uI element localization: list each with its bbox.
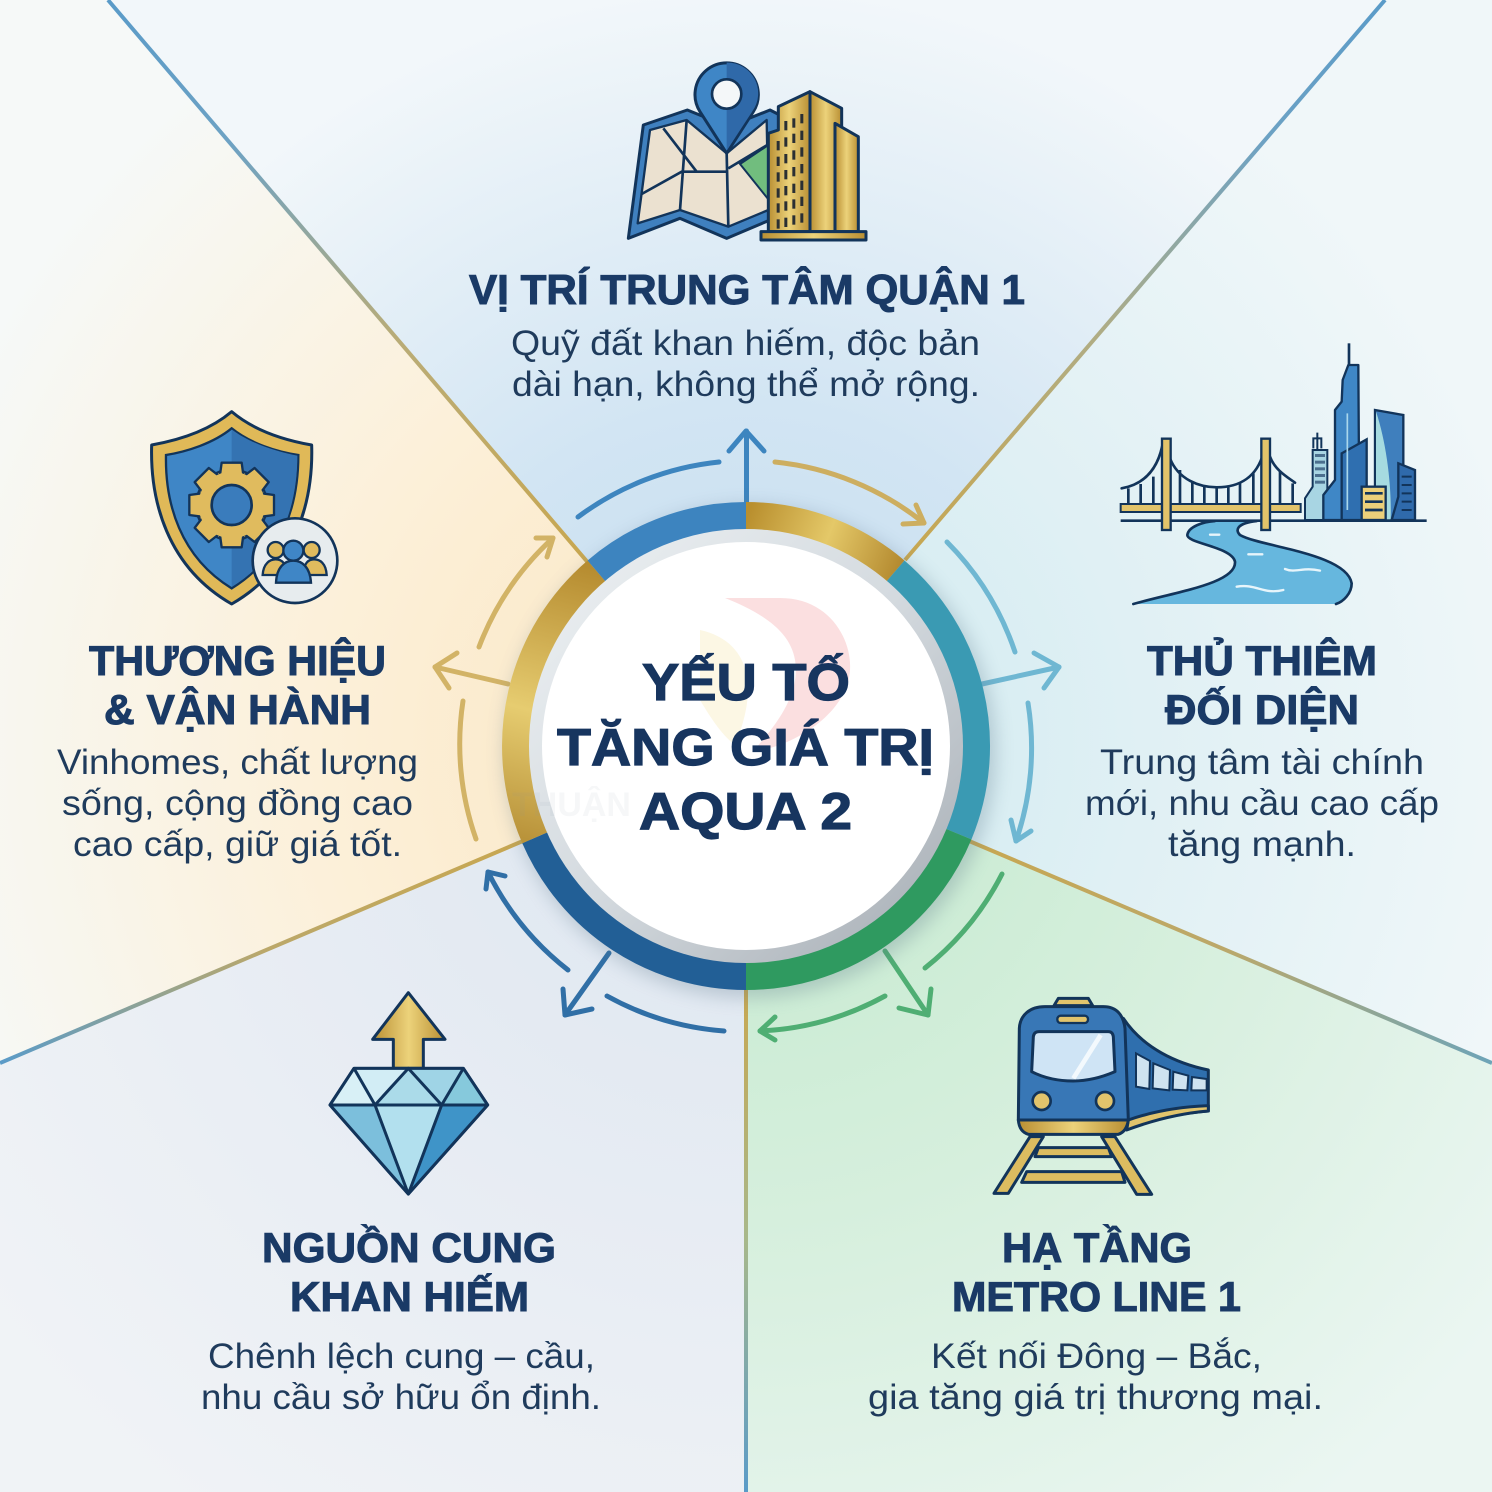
panel: Thu Thiem [1085, 343, 1439, 864]
text: brand and operation [57, 743, 418, 864]
watermark logo [512, 598, 850, 824]
icon: shield with gear and people [152, 412, 337, 604]
circular arrows around the hub [435, 431, 1059, 1040]
skyline [1305, 343, 1415, 520]
heading: metro: METRO LINE 1 [952, 1273, 1241, 1320]
text: brand and operation: cao cấp, giữ giá tốt. [73, 825, 402, 864]
hub title: AQUA 2 [639, 783, 852, 841]
hub title [557, 653, 934, 841]
gear [189, 463, 274, 547]
train side [1123, 1018, 1208, 1130]
hub white disc [542, 542, 950, 950]
heading: metro [952, 1224, 1241, 1320]
text: metro [868, 1337, 1323, 1417]
text: Thu Thiem: tăng mạnh. [1168, 825, 1356, 864]
text: metro: Kết nối Đông – Bắc, [931, 1337, 1262, 1376]
text: location: dài hạn, không thể mở rộng. [512, 365, 980, 404]
heading: location: VỊ TRÍ TRUNG TÂM QUẬN 1 [469, 265, 1025, 313]
hub title: YẾU TỐ [642, 653, 850, 712]
icon: metro train [994, 998, 1208, 1194]
diamond [330, 1068, 488, 1194]
panel: brand and operation [57, 412, 418, 864]
heading: scarce supply [262, 1223, 556, 1320]
segmented ring [521, 521, 971, 971]
central hub [504, 506, 996, 998]
green arrows [760, 874, 1002, 1040]
map [628, 110, 782, 238]
heading: Thu Thiem: THỦ THIÊM [1147, 636, 1377, 684]
icon: bridge and skyline [1121, 343, 1427, 604]
text: metro: gia tăng giá trị thương mại. [868, 1378, 1323, 1417]
text: brand and operation: Vinhomes, chất lượng [57, 743, 418, 782]
text: Thu Thiem: mới, nhu cầu cao cấp [1085, 784, 1439, 823]
gold arc arrow top right [775, 462, 924, 524]
text: Thu Thiem [1085, 743, 1439, 864]
rails [994, 1137, 1152, 1194]
text: location [511, 324, 980, 404]
panel: scarce supply [201, 993, 601, 1417]
heading: brand and operation: THƯƠNG HIỆU [89, 636, 386, 684]
text: scarce supply: nhu cầu sở hữu ổn định. [201, 1378, 601, 1417]
teal arrows [947, 542, 1059, 841]
bridge [1121, 439, 1427, 530]
pin [695, 63, 758, 153]
blue arc and up arrow [578, 431, 764, 517]
text: scarce supply [201, 1337, 601, 1417]
shield [152, 412, 312, 604]
watermark logo: THUẬN [512, 786, 631, 824]
heading: Thu Thiem: ĐỐI DIỆN [1165, 685, 1359, 733]
people badge [253, 518, 337, 603]
heading: scarce supply: NGUỒN CUNG [262, 1223, 556, 1271]
text: Thu Thiem: Trung tâm tài chính [1100, 743, 1424, 782]
panel: location [469, 63, 1025, 404]
heading: brand and operation: & VẬN HÀNH [104, 685, 371, 733]
heading: metro: HẠ TẦNG [1002, 1224, 1192, 1271]
icon: diamond with up arrow [330, 993, 488, 1194]
text: location: Quỹ đất khan hiếm, độc bản [511, 324, 980, 363]
building [761, 92, 866, 240]
heading: scarce supply: KHAN HIẾM [290, 1273, 529, 1320]
gold arrow [373, 993, 445, 1068]
icon: map, pin and building [628, 63, 866, 240]
text: brand and operation: sống, cộng đồng cao [62, 784, 413, 823]
panel: metro [868, 998, 1323, 1417]
river [1133, 521, 1352, 604]
heading: Thu Thiem [1147, 636, 1377, 733]
text: scarce supply: Chênh lệch cung – cầu, [208, 1337, 595, 1376]
train front [1018, 998, 1128, 1134]
hub title: TĂNG GIÁ TRỊ [557, 719, 934, 777]
dark blue arrows [486, 872, 724, 1031]
hub rim [529, 529, 963, 963]
heading: brand and operation [89, 636, 386, 733]
hub shadow [504, 506, 996, 998]
gold arrows left [435, 538, 553, 839]
